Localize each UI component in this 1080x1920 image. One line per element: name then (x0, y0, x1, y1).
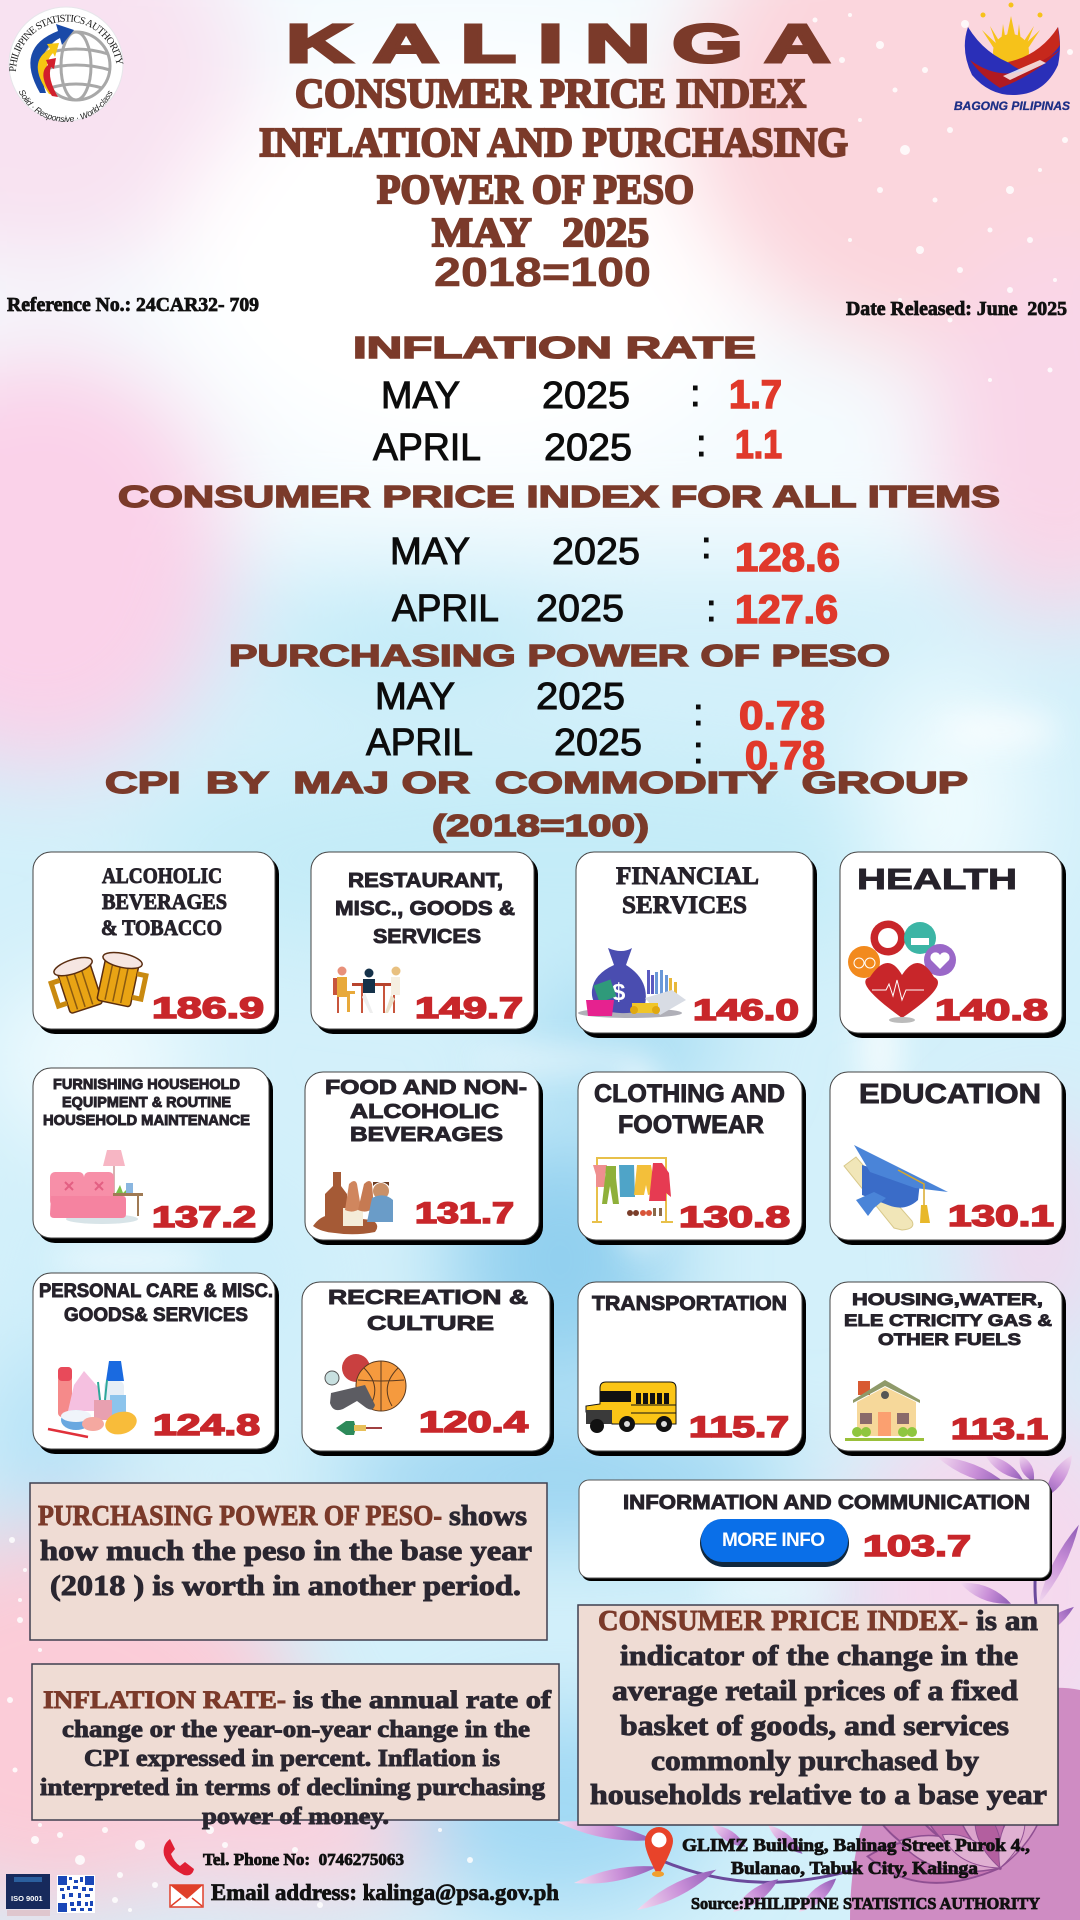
icon: money bag and charts: $ (612, 979, 626, 1006)
address (682, 1835, 1030, 1878)
email address: Email address: kalinga@psa.gov.ph (211, 1880, 559, 1906)
title block: MAY 2025 (432, 209, 649, 255)
icon: location pin (645, 1827, 673, 1877)
card: clothing and footwear: FOOTWEAR (618, 1111, 764, 1139)
card: restaurant, misc goods and services: MISC., GOODS & (335, 898, 515, 920)
definition: consumer price index: commonly purchased by (651, 1746, 979, 1777)
CPI all items section: 2025 (536, 588, 624, 630)
card: furnishing household equipment (33, 1068, 273, 1243)
card: food and non-alcoholic beverages: FOOD AND NON- (325, 1077, 527, 1099)
logo: Bagong Pilipinas (954, 2, 1070, 113)
definition: consumer price index: indicator of the change in the (620, 1641, 1018, 1672)
card: housing, water, electricity (830, 1282, 1066, 1456)
definition: inflation rate: is the annual rate of (293, 1687, 552, 1714)
telephone number: Tel. Phone No: 0746275063 (203, 1850, 404, 1869)
inflation rate section: : (690, 373, 701, 415)
card: personal care: PERSONAL CARE & MISC. (39, 1281, 273, 1302)
logo: Bagong Pilipinas: BAGONG PILIPINAS (954, 101, 1070, 113)
card: housing, water, electricity: OTHER FUELS (878, 1330, 1021, 1349)
card: clothing and footwear: CLOTHING AND (594, 1080, 785, 1108)
card: financial services (576, 852, 817, 1038)
icon: envelope (170, 1885, 203, 1907)
purchasing power section: PURCHASING POWER OF PESO (229, 638, 890, 673)
card: food and non-alcoholic beverages: 131.7 (415, 1197, 514, 1230)
card: food and non-alcoholic beverages: ALCOHOLIC (350, 1101, 499, 1123)
heading: CPI by major commodity group: (2018=100) (432, 808, 649, 843)
definition: purchasing power of peso: PURCHASING POWER OF PESO- (38, 1501, 442, 1532)
heading: CPI by major commodity group: CPI BY MAJ OR COMMODITY GROUP (105, 765, 968, 800)
button: more info: MORE INFO (722, 1530, 825, 1551)
button: more info (700, 1519, 849, 1567)
logo: PSA seal: PHILIPPINE STATISTICS AUTHORITY (9, 14, 124, 72)
card: personal care (33, 1273, 279, 1454)
inflation rate section: MAY (381, 375, 460, 417)
purchasing power section: APRIL (366, 722, 473, 764)
card: personal care: GOODS& SERVICES (64, 1305, 248, 1326)
card: alcoholic beverages and tobacco: 186.9 (152, 992, 264, 1025)
definition: consumer price index: is an (976, 1606, 1038, 1637)
card: housing, water, electricity: HOUSING,WATER, (852, 1290, 1043, 1309)
card: financial services: FINANCIAL (616, 863, 759, 890)
inflation rate section: 2025 (542, 375, 630, 417)
card: health: HEALTH (857, 864, 1017, 896)
CPI all items section: 127.6 (735, 588, 838, 632)
icon: games and sports (325, 1354, 406, 1435)
card: transportation: 115.7 (689, 1411, 789, 1444)
purchasing power section: : (693, 692, 704, 734)
card: recreation and culture: RECREATION & (328, 1287, 528, 1309)
card: information and communication: 103.7 (863, 1530, 971, 1563)
card: restaurant, misc goods and services: 149.7 (415, 992, 523, 1025)
definition: inflation rate: INFLATION RATE- (43, 1687, 286, 1714)
icon: refusing bottle (313, 1172, 393, 1234)
icon: graduation cap and diploma (844, 1145, 948, 1230)
definition: consumer price index: households relative to a base year (590, 1780, 1047, 1811)
purchasing power section: 0.78 (745, 734, 825, 778)
CPI all items section: : (706, 588, 717, 630)
card: education: EDUCATION (859, 1078, 1041, 1109)
definition: inflation rate: change or the year-on-year change in the (62, 1717, 530, 1743)
card: health (840, 852, 1066, 1038)
purchasing power section: : (693, 730, 704, 772)
definition: consumer price index: basket of goods, and services (620, 1711, 1009, 1742)
purchasing power section: 2025 (536, 676, 625, 718)
purchasing power section: 2025 (554, 722, 642, 764)
card: housing, water, electricity: ELE CTRICITY GAS & (844, 1311, 1052, 1330)
definition: purchasing power of peso: shows (449, 1501, 527, 1532)
card: furnishing household equipment: 137.2 (152, 1201, 256, 1234)
definition: inflation rate (32, 1664, 559, 1830)
card: transportation (578, 1282, 806, 1456)
inflation rate section: 1.1 (735, 423, 782, 467)
card: furnishing household equipment: EQUIPMENT & ROUTINE (62, 1094, 231, 1111)
icon: money bag and charts (578, 948, 686, 1018)
source: Source:PHILIPPINE STATISTICS AUTHORITY (691, 1894, 1040, 1913)
purchasing power section: MAY (375, 676, 455, 718)
card: education: 130.1 (948, 1200, 1054, 1233)
card: personal care: 124.8 (153, 1409, 260, 1442)
definition: purchasing power of peso: (2018 ) is worth in another period. (50, 1571, 521, 1602)
definition: consumer price index (578, 1605, 1058, 1825)
QR code (57, 1875, 95, 1913)
icon: toiletries (48, 1361, 139, 1438)
inflation rate section: INFLATION RATE (353, 330, 756, 365)
card: information and communication (579, 1480, 1052, 1581)
card: furnishing household equipment: HOUSEHOLD MAINTENANCE (43, 1112, 250, 1129)
icon: people dining (333, 966, 400, 1013)
CPI all items section: : (701, 525, 712, 567)
logo: PSA seal: Solid · Responsive · World-class (19, 90, 112, 122)
badge: ISO 9001 (6, 1874, 50, 1916)
definition: inflation rate: power of money. (202, 1804, 389, 1830)
card: alcoholic beverages and tobacco: ALCOHOLIC (102, 863, 222, 888)
definition: consumer price index: CONSUMER PRICE INDEX- (598, 1606, 968, 1637)
CPI all items section: MAY (390, 531, 470, 573)
CPI all items section: 128.6 (735, 536, 840, 580)
card: alcoholic beverages and tobacco: & TOBACCO (101, 915, 222, 940)
CPI all items section: 2025 (552, 531, 640, 573)
badge: ISO 9001: ISO 9001 (11, 1894, 43, 1903)
icon: school bus (586, 1382, 676, 1433)
card: recreation and culture: CULTURE (367, 1313, 494, 1335)
card: restaurant, misc goods and services: RESTAURANT, (348, 870, 503, 892)
card: alcoholic beverages and tobacco: BEVERAGES (102, 889, 227, 914)
title block: CONSUMER PRICE INDEX (295, 70, 806, 116)
title block (259, 14, 852, 295)
icon: telephone (164, 1839, 194, 1875)
purchasing power section: 0.78 (739, 694, 825, 738)
definition: purchasing power of peso: how much the peso in the base year (40, 1536, 532, 1567)
card: food and non-alcoholic beverages (305, 1072, 543, 1245)
definition: inflation rate: CPI expressed in percent. Inflation is (84, 1746, 500, 1772)
card: clothing and footwear (578, 1072, 806, 1245)
card: recreation and culture (302, 1282, 554, 1456)
logo: PSA seal (8, 6, 124, 122)
icon: house (845, 1380, 924, 1441)
card: health: 140.8 (935, 994, 1048, 1027)
address: GLIMZ Building, Balinag Street Purok 4., (682, 1835, 1030, 1855)
CPI all items section: APRIL (392, 588, 499, 630)
icon: beer mugs (46, 949, 149, 1017)
definition: purchasing power of peso (30, 1483, 547, 1640)
card: restaurant, misc goods and services (311, 852, 538, 1034)
reference number: Reference No.: 24CAR32- 709 (7, 294, 259, 316)
icon: health symbols and heart (848, 920, 956, 1023)
heading: CPI by major commodity group (105, 765, 968, 843)
date released: Date Released: June 2025 (846, 298, 1067, 320)
CPI all items section (118, 479, 1000, 632)
decorative flower and leaves (556, 1450, 1080, 1920)
address: Bulanao, Tabuk City, Kalinga (731, 1858, 978, 1878)
card: information and communication: INFORMATION AND COMMUNICATION (623, 1492, 1030, 1514)
card: education (830, 1072, 1066, 1245)
CPI all items section: CONSUMER PRICE INDEX FOR ALL ITEMS (118, 479, 1000, 514)
title block: POWER OF PESO (377, 166, 694, 212)
inflation rate section: APRIL (373, 427, 481, 469)
title block: INFLATION AND PURCHASING (259, 119, 848, 165)
card: recreation and culture: 120.4 (419, 1406, 528, 1439)
card: housing, water, electricity: 113.1 (951, 1413, 1048, 1446)
definition: inflation rate: interpreted in terms of declining purchasing (40, 1775, 545, 1801)
card: financial services: 146.0 (693, 994, 799, 1027)
card: furnishing household equipment: FURNISHING HOUSEHOLD (53, 1076, 240, 1093)
inflation rate section: 2025 (544, 427, 632, 469)
card: food and non-alcoholic beverages: BEVERAGES (350, 1124, 503, 1146)
inflation rate section: : (696, 423, 707, 465)
purchasing power section (229, 638, 890, 778)
card: clothing and footwear: 130.8 (679, 1201, 790, 1234)
card: transportation: TRANSPORTATION (592, 1293, 787, 1315)
icon: clothes rack (592, 1158, 673, 1222)
inflation rate section (353, 330, 782, 469)
icon: pink sofa and lamp (50, 1150, 143, 1224)
card: alcoholic beverages and tobacco (33, 852, 279, 1034)
title block: KALINGA (286, 14, 852, 74)
definition: consumer price index: average retail prices of a fixed (612, 1676, 1018, 1707)
card: financial services: SERVICES (622, 892, 747, 919)
inflation rate section: 1.7 (729, 373, 782, 417)
card: restaurant, misc goods and services: SERVICES (373, 926, 481, 948)
title block: 2018=100 (434, 249, 651, 295)
